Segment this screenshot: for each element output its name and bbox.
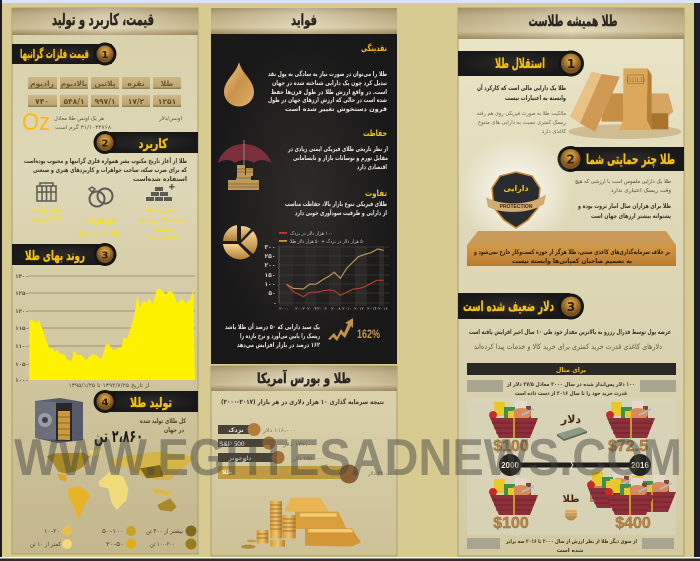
- icon: gold bars: [568, 68, 682, 139]
- metal price table: [28, 77, 181, 107]
- ounce note: [22, 109, 182, 136]
- chart: nasdaq vs nasdaq plus gold: ۲۰۰۲: [295, 307, 305, 312]
- chart: nasdaq vs nasdaq plus gold: ۵۰ هزار دلار در نزدک + ۵۰ هزار دلار طلا: [290, 238, 365, 245]
- chart: nasdaq vs nasdaq plus gold: ۲۰۰: [264, 262, 276, 269]
- chart: nasdaq vs nasdaq plus gold: ۲۰۰۶: [317, 307, 327, 312]
- liquidity section: شده است در حالی که ارزش ارزهای جهان در طول: [268, 96, 387, 104]
- usage paragraph: استفاده شده‌است: [133, 175, 187, 183]
- metal price table: ۷۴۰: [35, 97, 49, 106]
- gold production total: در جهان: [164, 426, 184, 434]
- heading: gold is always gold: طلا همیشه طلاست: [528, 12, 618, 30]
- dollar text: [469, 328, 671, 351]
- portfolio note: [225, 322, 320, 349]
- protection section: مقابل تورم و نوسانات بازار و نابسامانی: [293, 154, 388, 162]
- map legend: کمتر از ۱۰ تن: [30, 541, 61, 548]
- chart: gold price trend: از تاریخ ۱۳۹۴/۷/۲۵ تا ۱۳۹۵/۱/۲۵: [68, 383, 150, 389]
- chart: nasdaq vs nasdaq plus gold: ۱۰۰: [264, 281, 276, 288]
- section 2 header: کاربرد: [138, 137, 168, 152]
- bar chart: investment result: ۱۵۵،۰۰۰ دلار: [292, 456, 323, 462]
- growth figure: 162%: [357, 327, 380, 341]
- icon: gold bars: [146, 184, 174, 201]
- icon: umbrella over coins: [218, 140, 272, 190]
- section 1 header: 1: [102, 50, 109, 61]
- protection section: حفاظت: [363, 129, 387, 139]
- icon: wedding rings: [89, 187, 112, 206]
- difference section: از دارایی و ظرفیت سودآوری خوبی دارد: [295, 208, 387, 217]
- gold production total: کل طلای تولید شده: [140, 417, 186, 425]
- basket group: gold 2016: [587, 471, 676, 532]
- gold production total: [94, 417, 186, 447]
- section 3 header: dollar weakened: دلار ضعیف شده است: [463, 299, 554, 315]
- example banner: [467, 363, 676, 375]
- metal price table: نقره: [127, 79, 145, 88]
- metal price table: پالادیوم: [61, 80, 87, 88]
- callout: gold box: [467, 231, 676, 266]
- icon: rising arrow: [328, 318, 353, 341]
- ounce note: ۳۱/۱۰۳۴۷۶۸ گرم است: [55, 124, 111, 131]
- map legend: بیشتر از ۴۰۰ تن: [146, 528, 183, 535]
- section 3 header: dollar weakened: 3: [567, 300, 575, 314]
- usage share labels: جواهرات: [86, 215, 116, 226]
- section 4 header: 4: [102, 398, 109, 408]
- panel: gold and US stock market: [211, 366, 397, 556]
- example top text: قدرت خرید خود را تا سال ۲۰۱۶ از دست داده است: [515, 391, 627, 397]
- icon: government reserves building: [37, 183, 56, 201]
- metal price table: ۱۲۵۱: [158, 97, 176, 106]
- icon: open vault with gold: [35, 398, 83, 443]
- section 3 header: 3: [102, 250, 109, 262]
- protection section: از نظر تاریخی طلای فیزیکی ایمنی زیادی در: [287, 145, 388, 153]
- illustration panel: baskets: [467, 397, 676, 535]
- basket: dollar 2016: $72.5: [608, 438, 648, 455]
- liquidity section: نقدینگی: [361, 43, 387, 54]
- bar chart: investment result: ۱۱۶،۰۰۰ دلار: [262, 428, 296, 434]
- panel: price, usage and production: [12, 8, 198, 554]
- map legend: [30, 526, 197, 550]
- metal price table: طلا: [161, 79, 173, 88]
- bar chart: investment result: S&P 500: [219, 441, 245, 448]
- liquidity section: است. در واقع ارزش طلا در طول قرن‌ها حفظ: [271, 88, 387, 96]
- basket: gold 2000: [489, 478, 538, 532]
- chart: nasdaq vs nasdaq plus gold: ۰: [273, 300, 277, 307]
- usage share labels: شمش و سکه: [146, 206, 180, 214]
- liquidity section: تبدیل کرد چون یک دارایی شناخته شده در جهان: [272, 79, 387, 87]
- bar chart: investment result: نزدک: [228, 426, 244, 434]
- ounce note: Oz: [22, 109, 50, 136]
- bar chart: investment result: داوجونز: [228, 455, 251, 462]
- chart: nasdaq vs nasdaq plus gold: ۲۰۱۲: [354, 307, 364, 312]
- basket: dollar 2000: $100: [493, 438, 529, 455]
- icon: pile of gold bars and coins: [241, 498, 361, 549]
- section 1 header: [12, 42, 116, 66]
- usage share labels: سرمایه‌گذاری‌های: [140, 216, 186, 224]
- section 2 header: [94, 131, 198, 154]
- gold production total: ۲،۸۶۰ تن: [94, 427, 143, 447]
- chart: gold price trend: ۱۳۰۰: [15, 274, 29, 280]
- subtitle: نتیجه سرمایه گذاری ۱۰ هزار دلاری در هر بازار (۲۰۱۷-۲۰۰۰): [221, 398, 384, 406]
- gold label and coins: طلا: [562, 494, 580, 505]
- map legend: ۱۰۰-۲۰۰ تن: [150, 541, 175, 548]
- independence text: مالکیت طلا به صورت فیزیکی روی هم رفته: [477, 110, 566, 117]
- independence text: ریسک کمتری نسبت به دارایی های متنوع: [478, 119, 566, 126]
- chart: gold price trend: ۱۲۵۰: [15, 291, 29, 297]
- portfolio note: ۱۶۲ درصد در بازار افزایش می‌دهد: [237, 341, 320, 349]
- heading: benefits: فواید: [291, 11, 317, 29]
- usage share labels: (۵۰/۵ درصد): [79, 229, 121, 238]
- map legend: ۵۰-۱۰۰: [102, 528, 124, 535]
- map legend: ۲۰-۵۰: [106, 541, 124, 548]
- basket: dollar 2016: [606, 401, 655, 455]
- section 1 header: independence: استقلال طلا: [495, 56, 545, 72]
- bar chart: investment result: [218, 423, 396, 484]
- example bottom text: [467, 538, 674, 554]
- usage share labels: ذخایر دولت‌ها: [31, 206, 63, 214]
- section 2 header: protective umbrella: 2: [566, 152, 575, 166]
- protection section: [287, 129, 388, 171]
- protection text: وقت ریسک اعتباری ندارد: [611, 187, 671, 194]
- chart: nasdaq vs nasdaq plus gold: ۵۰: [268, 290, 276, 297]
- gold label and coins: [562, 494, 580, 520]
- independence text: [477, 83, 566, 135]
- callout: gold box: به تصمیم صاحبان کمپانی‌ها وابسته نیست: [512, 257, 632, 265]
- heading: gold and American stock market: طلا و بورس آمریکا: [257, 369, 351, 387]
- liquidity section: طلا را می‌توان در صورت نیاز به سادگی به پول نقد: [268, 70, 387, 78]
- ounce note: هر یک اونس طلا معادل: [54, 115, 104, 122]
- portfolio note: یک سبد دارایی که ۵۰ درصد آن طلا باشد: [225, 322, 320, 331]
- protection text: طلا یک دارایی ملموس است با ارزشی که هیچ: [575, 178, 671, 185]
- protection text: پشتوانه بیشتر ارزهای جهان است: [591, 212, 671, 220]
- chart: gold price trend: ۱۱۵۰: [15, 326, 29, 332]
- dollar label and cash: [557, 413, 587, 441]
- map legend: ۱۰-۲۰: [44, 528, 60, 535]
- section 4 header: تولید طلا: [130, 396, 172, 411]
- chart: nasdaq vs nasdaq plus gold: ۳۰۰: [264, 244, 276, 251]
- section 4 header: [94, 390, 198, 413]
- icon: gold drop: [224, 62, 254, 106]
- section 3 header: dollar weakened: [458, 293, 584, 320]
- liquidity section: [268, 43, 387, 113]
- example bottom text: شده است: [557, 548, 583, 554]
- portfolio note: ریسک را پایین می‌آورد و نرخ بازده را: [240, 331, 320, 340]
- panel: benefits: [211, 8, 397, 364]
- chart: nasdaq vs nasdaq plus gold: ۲۵۰: [264, 253, 276, 260]
- example top text: [467, 380, 676, 397]
- chart: gold price trend: ۱۰۵۰: [15, 362, 29, 368]
- section 1 header: independence: 1: [567, 57, 575, 71]
- chart: nasdaq vs nasdaq plus gold: ۲۰۰۸: [331, 307, 341, 312]
- usage share labels: [31, 206, 186, 242]
- usage share labels: (۱۷/۴ درصد): [32, 215, 62, 223]
- usage paragraph: طلا از آغاز تاریخ مکتوب بشر همواره فلزی گرانبها و محبوب بوده‌است: [24, 156, 187, 165]
- metal price table: رادیوم: [30, 79, 54, 88]
- timeline 2000 to 2016: 2000: [501, 461, 519, 470]
- panel: gold is always gold: [458, 8, 684, 556]
- chart: nasdaq vs nasdaq plus gold: ۲۰۰۴: [307, 307, 317, 312]
- metal price table: ۵۴۸/۱: [63, 97, 85, 106]
- basket: dollar 2000: [489, 401, 538, 455]
- usage paragraph: که برای ضرب سکه، ساخت جواهرات و کاربردهای هنری و صنعتی: [33, 166, 187, 174]
- icon: protection shield: دارایی: [503, 184, 529, 193]
- usage share labels: شخصی: [153, 225, 173, 233]
- chart: nasdaq vs nasdaq plus gold: ۲۰۱۰: [342, 307, 352, 312]
- protection section: اقتصادی دارد: [357, 163, 387, 171]
- usage paragraph: [24, 156, 187, 183]
- liquidity section: قرون دستخوش تغییر شده است: [285, 105, 387, 113]
- metal price table: ۹۹۷/۱: [94, 97, 116, 106]
- example banner: برای مثال: [556, 366, 586, 374]
- chart: nasdaq vs nasdaq plus gold: ۱۰۰ هزار دلار در نزدک: [290, 230, 333, 237]
- example bottom text: از سوی دیگر طلا از نظر ارزش از سال ۲۰۰۰ تا ۲۰۱۶ سه برابر: [505, 538, 637, 545]
- metal price table: پلاتین: [94, 79, 116, 88]
- metal price table: ۱۷/۲: [128, 97, 145, 106]
- difference section: [285, 189, 387, 217]
- chart: nasdaq vs nasdaq plus gold: ۲۰۱۶: [378, 307, 388, 312]
- ounce note: اونس/دلار: [158, 116, 182, 122]
- heading: price usage production: قیمت، کاربرد و تولید: [52, 10, 154, 29]
- chart: gold price trend: ۱۰۰۰: [15, 378, 29, 384]
- section 2 header: 2: [102, 138, 109, 150]
- section 3 header: روند بهای طلا: [25, 249, 85, 264]
- icon: protection shield: PROTECTION: [500, 204, 533, 210]
- chart: gold price trend: [15, 274, 195, 389]
- icon: gold bars: GOLD: [626, 77, 645, 84]
- dollar label and cash: دلار: [560, 413, 581, 426]
- bar chart: investment result: ۴۴۰،۰۰۰ دلار: [367, 471, 396, 477]
- section 1 header: independence: [458, 50, 584, 76]
- basket group: gold 2016: $400: [615, 515, 651, 532]
- timeline 2000 to 2016: 2016: [631, 461, 649, 470]
- chart: nasdaq vs nasdaq plus gold: [264, 230, 389, 312]
- independence text: کاغذی دارد: [542, 128, 566, 135]
- chart: nasdaq vs nasdaq plus gold: ۲۰۰۰: [279, 307, 289, 312]
- chart: gold price trend: ۱۲۰۰: [15, 309, 29, 315]
- usage share labels: (۱۹/۷ درصد): [148, 234, 178, 242]
- protection text: [575, 178, 671, 220]
- independence text: طلا یک دارایی مالی است که کارکرد آن: [477, 83, 566, 92]
- icon: protection shield: [458, 134, 574, 250]
- bar chart: investment result: طلا: [222, 469, 232, 476]
- difference section: تفاوت: [365, 189, 387, 199]
- chart: nasdaq vs nasdaq plus gold: ۲۰۱۴: [367, 307, 377, 312]
- map: world gold production: [47, 448, 195, 520]
- chart: nasdaq vs nasdaq plus gold: ۱۵۰: [264, 272, 276, 279]
- basket: gold 2000: $100: [493, 515, 529, 532]
- timeline 2000 to 2016: [499, 454, 651, 476]
- section 2 header: protective umbrella: [558, 146, 684, 172]
- example top text: ۱۰۰ دلار پس‌انداز شده در سال ۲۰۰۰ معادل ۲۷/۵ دلار از: [506, 382, 635, 388]
- difference section: طلای فیزیکی تنوع بازار بالا، حفاظت مناسب: [285, 200, 387, 208]
- section 1 header: قیمت فلزات گرانبها: [20, 47, 89, 61]
- section 3 header: [12, 243, 116, 266]
- dollar text: دلارهای کاغذی قدرت خرید کمتری برای خرید کالا و خدمات پیدا کرده‌اند: [474, 342, 662, 351]
- independence text: وابسته به اعتبارات نیست: [505, 94, 566, 102]
- chart: gold price trend: ۱۱۰۰: [15, 344, 29, 350]
- bar chart: investment result: ۱۳۶،۰۰۰ دلار: [282, 442, 318, 448]
- pie chart icon: [223, 225, 257, 259]
